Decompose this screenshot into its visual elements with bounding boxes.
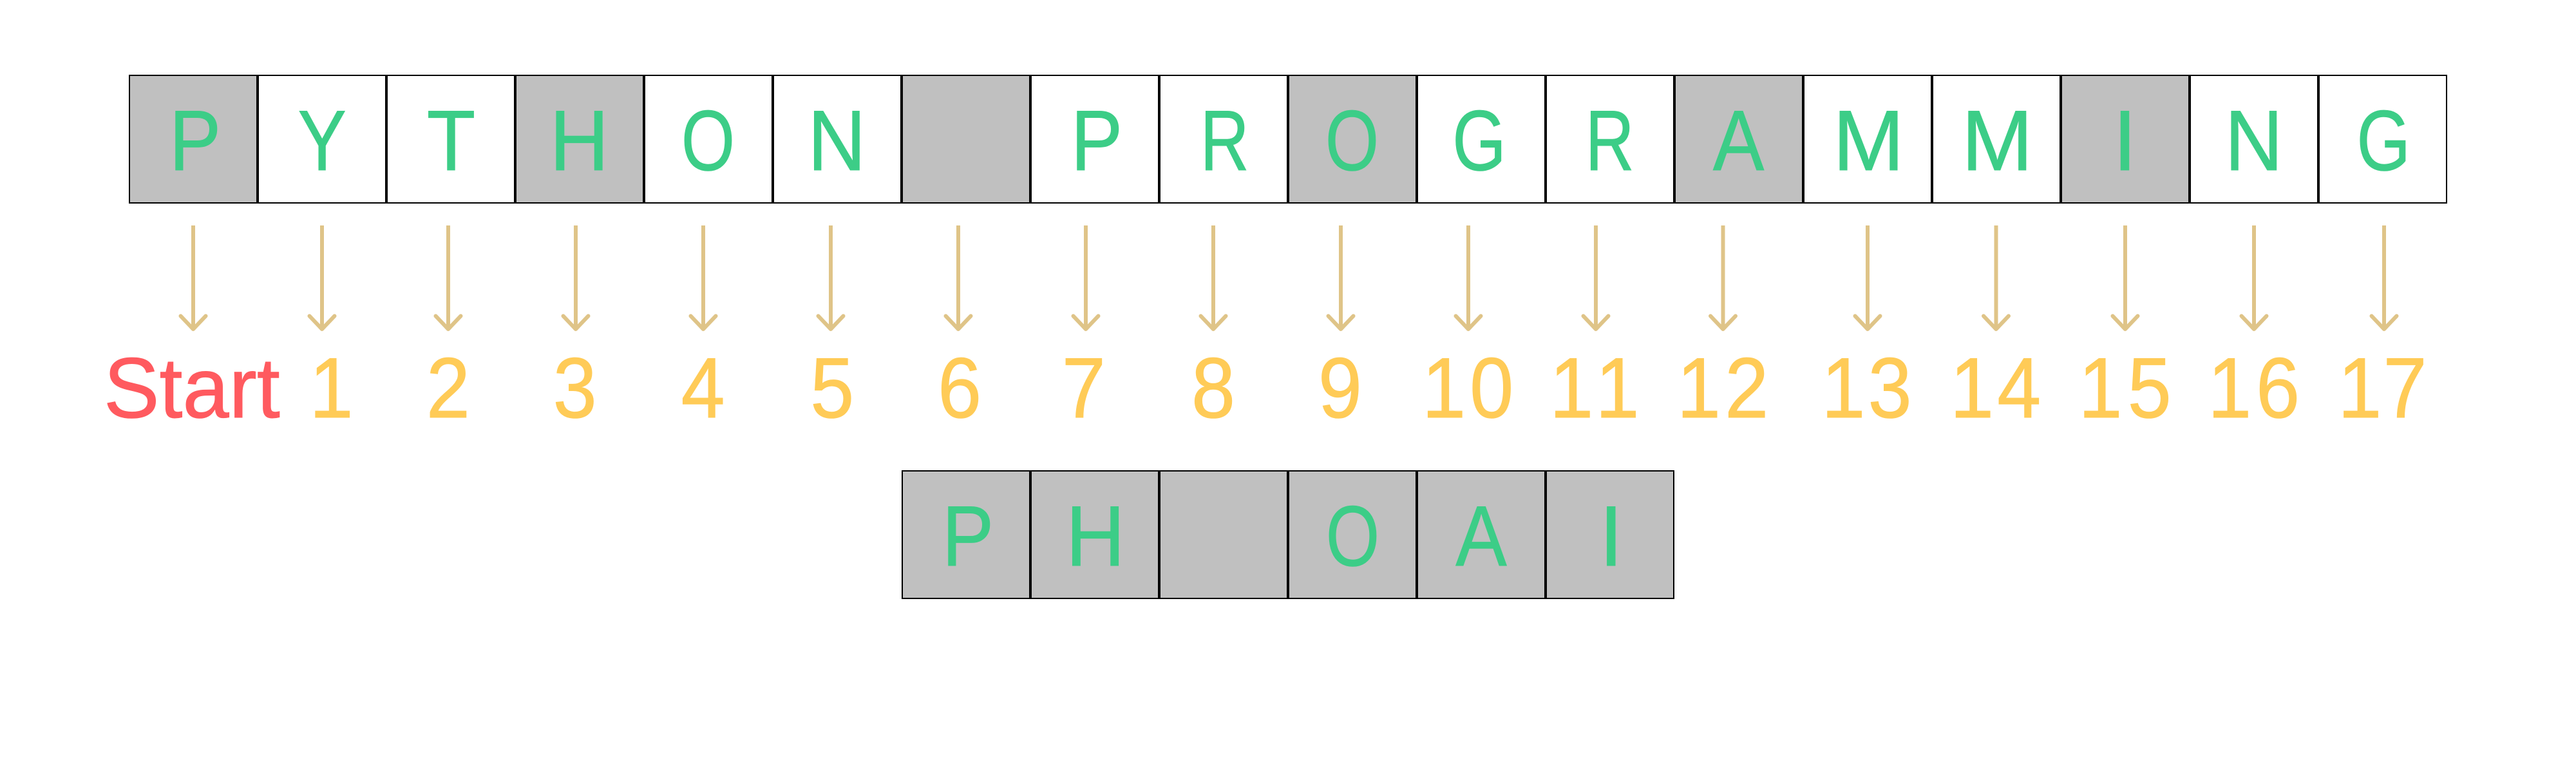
arrow: 17	[2371, 225, 2397, 329]
cell: G: G	[2356, 93, 2410, 189]
label: 2: 2	[426, 340, 470, 436]
result cell: P: P	[942, 488, 994, 584]
label: 16: 16	[2208, 340, 2300, 436]
label: 1: 1	[309, 340, 354, 436]
cell: Y	[258, 75, 386, 203]
label: 6: 6	[938, 340, 981, 436]
source string row: PYTHON PROGRAMMING	[129, 75, 2447, 203]
cell: P	[129, 75, 257, 203]
cell: N: N	[808, 93, 866, 189]
cell: T	[387, 75, 515, 203]
cell: M: M	[1833, 93, 1904, 189]
cell: N	[2190, 75, 2318, 203]
cell: R	[1546, 75, 1674, 203]
result cell: H	[1031, 471, 1159, 598]
result cell: O	[1289, 471, 1416, 598]
arrow: 16	[2241, 225, 2267, 329]
cell: N: N	[2225, 93, 2283, 189]
label: 14: 14	[1950, 340, 2041, 436]
arrow: 15	[2112, 225, 2138, 329]
label: 5: 5	[810, 340, 854, 436]
cell: O: O	[1325, 93, 1379, 189]
arrow: 10	[1455, 225, 1481, 329]
result cell: space	[1160, 471, 1287, 598]
result cell: P	[902, 471, 1030, 598]
cell: H	[516, 75, 643, 203]
result cell: I: I	[1599, 489, 1623, 584]
cell: G: G	[1452, 93, 1506, 189]
cell: Y: Y	[298, 93, 346, 189]
arrow: 8	[1200, 225, 1226, 329]
arrow: 13	[1855, 225, 1880, 329]
label: 11: 11	[1549, 340, 1640, 436]
cell: P: P	[1071, 92, 1122, 188]
arrow: 12	[1710, 225, 1736, 329]
arrow: 9	[1328, 225, 1354, 329]
label: 7: 7	[1062, 340, 1106, 436]
label: 17: 17	[2338, 340, 2427, 436]
cell: T: T	[427, 93, 475, 189]
result cell: A	[1417, 471, 1545, 598]
label: 15: 15	[2079, 340, 2172, 436]
cell: P	[1031, 75, 1159, 203]
cell: P: P	[169, 92, 221, 188]
label: 13: 13	[1821, 340, 1912, 436]
arrow: 5	[818, 225, 844, 329]
cell: I: I	[2113, 93, 2137, 189]
result string row: PH OAI	[902, 471, 1674, 598]
cell: R: R	[1586, 93, 1634, 189]
arrow: 6	[945, 225, 971, 329]
arrow: Start	[180, 225, 206, 329]
arrow: 3	[563, 225, 589, 329]
arrow: 7	[1073, 225, 1099, 329]
cell: R	[1160, 75, 1287, 203]
cell: I	[2061, 75, 2189, 203]
cell: N	[773, 75, 901, 203]
cell: G	[1417, 75, 1545, 203]
cell: space	[902, 75, 1030, 203]
cell: A: A	[1713, 93, 1764, 188]
cell: O	[1289, 75, 1416, 203]
cell: H: H	[549, 92, 609, 189]
result cell: A: A	[1455, 488, 1507, 584]
cell: M	[1804, 75, 1931, 203]
cell: G	[2319, 75, 2447, 203]
cell: M	[1933, 75, 2060, 203]
arrow: 14	[1984, 225, 2009, 329]
label: 8: 8	[1191, 340, 1235, 436]
result cell: I	[1546, 471, 1674, 598]
cell: M: M	[1962, 93, 2033, 189]
result cell: O: O	[1326, 488, 1379, 584]
label: 4: 4	[681, 340, 725, 436]
arrow: 4	[690, 225, 716, 329]
cell: O	[645, 75, 772, 203]
arrow: 2	[435, 225, 461, 329]
label: 3: 3	[553, 340, 597, 436]
cell: O: O	[681, 93, 735, 189]
cell: A	[1675, 75, 1803, 203]
cell: R: R	[1200, 93, 1249, 189]
label: Start: Start	[104, 340, 280, 435]
index labels	[104, 340, 2427, 436]
label: 12: 12	[1677, 340, 1768, 436]
result cell: H: H	[1066, 488, 1125, 584]
label: 10: 10	[1422, 340, 1513, 436]
label: 9: 9	[1318, 340, 1362, 436]
arrow: 11	[1583, 225, 1609, 329]
arrow: 1	[309, 225, 335, 329]
index arrows	[180, 225, 2397, 329]
